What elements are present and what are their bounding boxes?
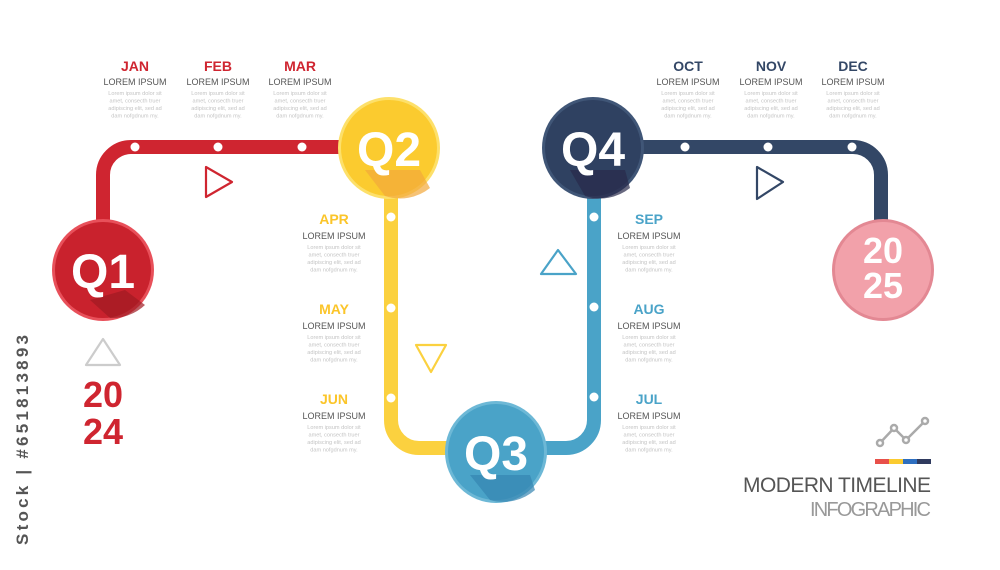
path: blue segment <box>530 190 594 448</box>
months: JUN <box>320 391 348 407</box>
path: navy segment <box>635 147 881 225</box>
months: AUG <box>633 301 665 317</box>
months: FEB <box>204 58 232 74</box>
months: MAY <box>319 301 350 317</box>
months: LOREM IPSUM <box>739 77 803 87</box>
circle: Q2 <box>338 97 440 199</box>
months: LOREM IPSUM <box>821 77 885 87</box>
months: LOREM IPSUM <box>302 411 366 421</box>
circle: 2025 <box>832 219 934 321</box>
months: SEP <box>635 211 663 227</box>
months: LOREM IPSUM <box>617 411 681 421</box>
months: OCT <box>673 58 703 74</box>
color bar <box>875 459 931 464</box>
circle: Q1: Q1 <box>71 246 135 299</box>
months: LOREM IPSUM <box>186 77 250 87</box>
triangles <box>86 167 783 372</box>
circle: 2025: 20 <box>863 230 903 271</box>
watermark id text: Stock | #651813893 <box>13 335 32 545</box>
icon: line chart <box>877 418 928 446</box>
months: LOREM IPSUM <box>617 231 681 241</box>
title <box>743 474 931 521</box>
months: MAR <box>284 58 316 74</box>
circle: Q4 <box>542 97 644 199</box>
months: LOREM IPSUM <box>268 77 332 87</box>
months: NOV <box>756 58 787 74</box>
year 2024 <box>83 374 123 452</box>
circle: 2025: 25 <box>863 265 903 306</box>
path: yellow segment <box>391 190 460 448</box>
months <box>103 58 885 454</box>
months: LOREM IPSUM <box>302 321 366 331</box>
months: JUL <box>636 391 663 407</box>
title: INFOGRAPHIC <box>810 499 931 521</box>
circle: Q3 <box>445 401 547 503</box>
months: DEC <box>838 58 868 74</box>
months: LOREM IPSUM <box>302 231 366 241</box>
months: APR <box>319 211 349 227</box>
circle: Q3: Q3 <box>464 428 528 481</box>
circle: Q1 <box>52 219 154 321</box>
path dots <box>130 142 856 402</box>
months: LOREM IPSUM <box>617 321 681 331</box>
months: LOREM IPSUM <box>103 77 167 87</box>
months: JAN <box>121 58 149 74</box>
circle: Q4: Q4 <box>561 124 625 177</box>
path: red segment <box>103 147 345 220</box>
circle: Q2: Q2 <box>357 124 421 177</box>
months: LOREM IPSUM <box>656 77 720 87</box>
title: MODERN TIMELINE <box>743 474 931 497</box>
year 2024: 20 <box>83 374 123 415</box>
year 2024: 24 <box>83 411 123 452</box>
